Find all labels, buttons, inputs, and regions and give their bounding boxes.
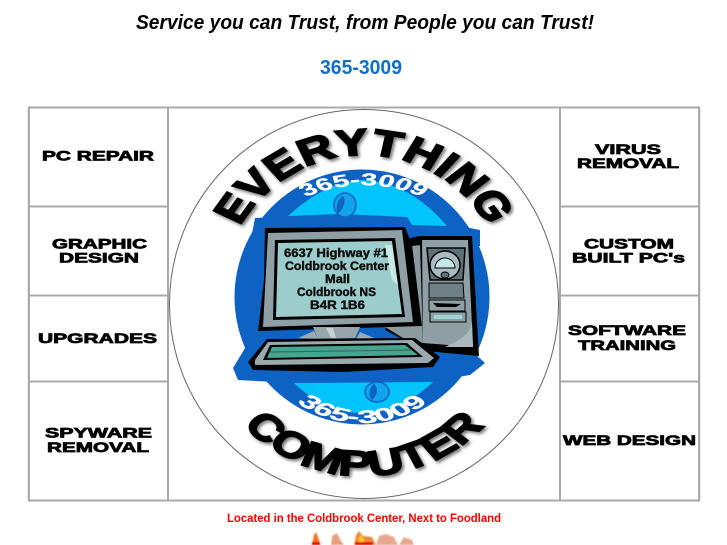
label: Graphic Design: DESIGN <box>59 250 139 266</box>
icon: computer tower <box>385 236 479 356</box>
blue disc <box>233 170 490 424</box>
heading: slogan: Service you can Trust, from People you can Trust! <box>136 12 594 34</box>
label: Graphic Design <box>52 236 147 266</box>
label: Spyware Removal: SPYWARE <box>45 424 152 440</box>
label: Virus Removal: VIRUS <box>595 141 661 157</box>
screen address text: Mall <box>325 274 350 286</box>
phone number bottom: 365-3009 <box>299 395 424 424</box>
label: PC Repair: PC REPAIR <box>42 148 154 164</box>
label: Graphic Design: GRAPHIC <box>52 236 147 252</box>
label: Virus Removal: REMOVAL <box>577 155 680 171</box>
label: Spyware Removal <box>45 424 152 455</box>
icon: bottom orb <box>365 382 389 402</box>
badge outline <box>170 110 558 498</box>
title: EVERYTHING: EVERYTHING <box>212 128 515 228</box>
label: Virus Removal <box>577 141 680 171</box>
label: Upgrades: UPGRADES <box>38 330 157 346</box>
screen address text <box>284 248 390 312</box>
label: Custom Built PCs: CUSTOM <box>584 236 674 252</box>
label: Spyware Removal: REMOVAL <box>47 439 150 455</box>
light blue crescent top <box>288 180 447 226</box>
label: Custom Built PCs <box>572 236 685 266</box>
icon: keyboard <box>248 338 440 372</box>
heading: phone number: 365-3009 <box>320 57 402 79</box>
screen address text: Coldbrook Center <box>285 261 390 273</box>
label: Custom Built PCs: BUILT PC's <box>572 250 685 266</box>
label: Software Training: SOFTWARE <box>568 322 686 338</box>
panel: services table <box>28 108 700 500</box>
location note: Located in the Coldbrook Center, Next to Foodland <box>227 513 501 525</box>
icon: flames <box>312 531 414 545</box>
screen address text: B4R 1B6 <box>310 300 365 312</box>
logo: Everything Computer badge <box>169 109 559 499</box>
phone number top: 365-3009 <box>299 173 428 196</box>
screen address text: Coldbrook NS <box>297 287 376 299</box>
label: Software Training: TRAINING <box>578 337 676 353</box>
icon: monitor <box>258 227 422 331</box>
icon: monitor stand <box>298 327 374 339</box>
label: Web Design: WEB DESIGN <box>563 432 696 448</box>
icon: top orb <box>334 193 356 217</box>
label: Software Training <box>568 322 686 353</box>
screen address text: 6637 Highway #1 <box>284 248 389 260</box>
title: COMPUTER: COMPUTER <box>248 412 490 480</box>
light blue crescent bottom <box>294 382 433 413</box>
